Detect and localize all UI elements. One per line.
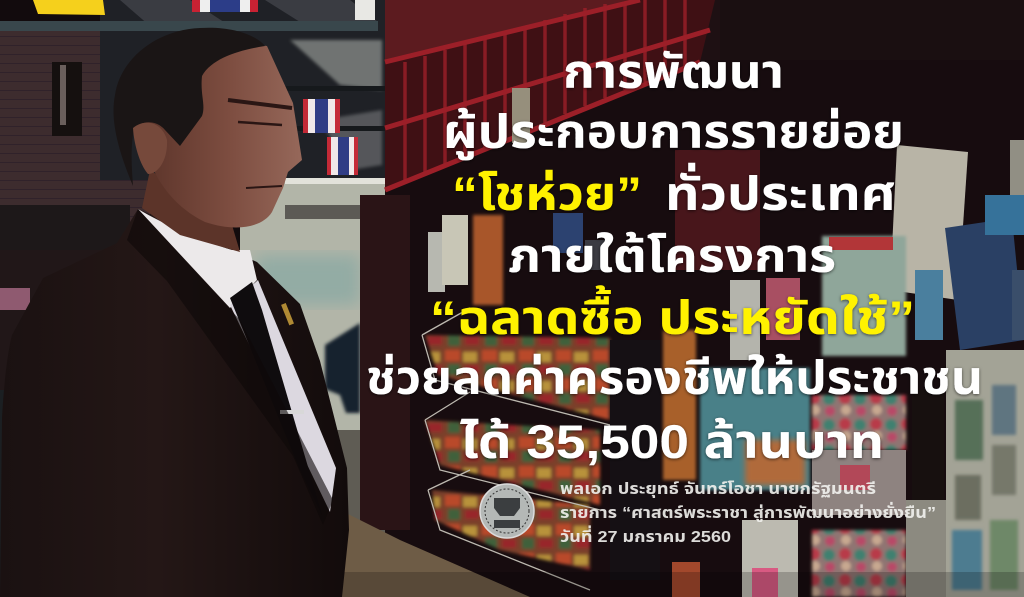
tie bar [280,410,304,414]
flag: yellow [33,0,105,15]
headline line 6: ช่วยลดค่าครองชีพให้ประชาชน [366,351,983,404]
shirt front [230,280,336,512]
goods: balloon packs [812,395,906,450]
flag: Thai, middle [303,99,340,133]
icon: government seal [480,484,534,538]
wire racks with snacks [340,308,660,597]
suit body [0,209,349,597]
flag: Thai, lower [327,137,358,175]
goods: card rack [946,350,1024,597]
neck [142,170,240,252]
headline line 5: “ฉลาดซื้อ ประหยัดใช้” [430,285,915,344]
goods: orange packets column [663,330,696,480]
goods: coloured poster [700,368,810,490]
speaker name: พลเอก ประยุทธ์ จันทร์โอชา นายกรัฐมนตรี [560,481,876,498]
portrait: man in dark suit [0,28,349,597]
hanging goods and signs [428,88,1024,597]
programme name: รายการ “ศาสตร์พระราชา สู่การพัฒนาอย่างยั่งยืน” [560,502,936,523]
headline line 4: ภายใต้โครงการ [508,229,836,282]
necktie [230,282,322,515]
shirt collar [138,209,257,308]
flag: Thai, top [192,0,258,12]
attribution text [560,481,936,546]
headline text block [366,45,983,468]
goods: white paper and pink item [742,520,798,597]
dark bottom strip [330,572,1024,597]
head and face [140,38,302,227]
eye, brow, mouth [228,100,292,188]
headline line 3a: “โชห่วย” [452,167,642,220]
lapel [127,209,333,525]
ear [133,123,167,174]
left wooden house [0,30,150,597]
headline line 7: ได้ 35,500 ล้านบาท [460,415,884,468]
red wooden shopfront upper [360,0,1024,597]
date: วันที่ 27 มกราคม 2560 [560,525,731,546]
back wall and motorbike [240,178,480,597]
lapel pin [281,303,294,325]
headline line 3b: ทั่วประเทศ [665,163,896,220]
roof structure and hanging flags [0,0,385,180]
headline line 1: การพัฒนา [563,45,784,98]
hair [114,28,265,186]
headline line 2: ผู้ประกอบการรายย่อย [443,105,904,160]
